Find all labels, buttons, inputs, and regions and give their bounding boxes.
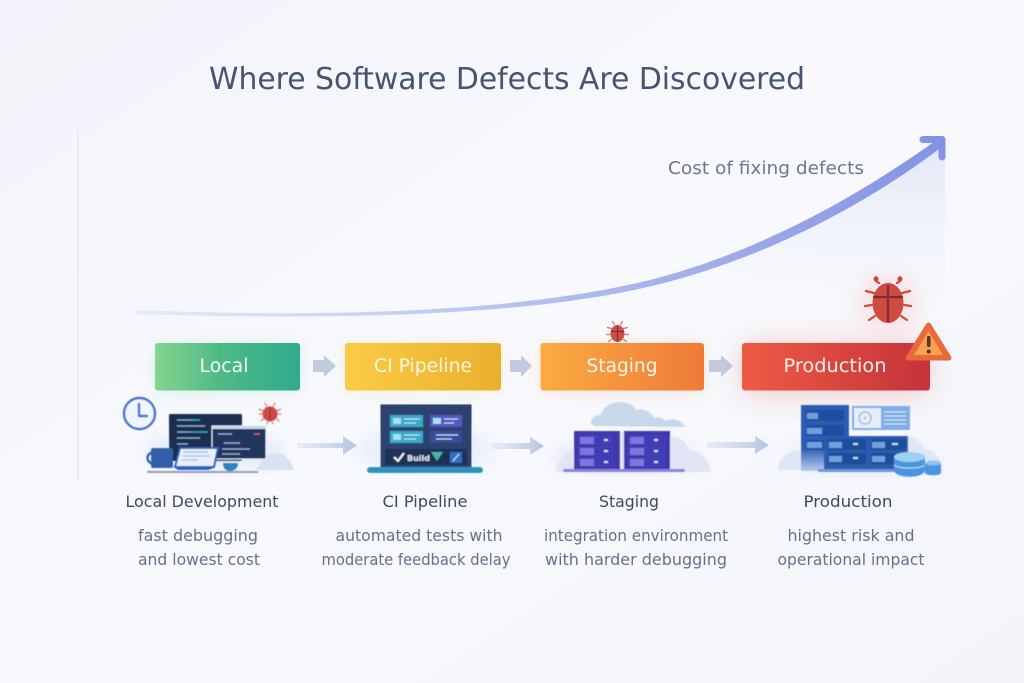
build bar: Build bbox=[407, 454, 430, 463]
label: cost of fixing defects: Cost of fixing defects bbox=[668, 158, 864, 179]
column text: Local Development bbox=[126, 492, 278, 569]
monitor bbox=[169, 414, 242, 461]
stage: CI Pipeline bbox=[345, 343, 501, 391]
arrow: CI Pipeline to Staging bbox=[510, 355, 532, 377]
arrow: curve head bbox=[923, 140, 942, 157]
arrow: Staging illustration to Production illustration bbox=[707, 436, 769, 454]
stage: CI Pipeline: CI Pipeline bbox=[374, 356, 472, 377]
icon: cloud bbox=[591, 402, 685, 427]
column text: CI Pipeline: moderate feedback delay bbox=[322, 550, 510, 569]
illustration: CI pipeline laptop bbox=[355, 405, 495, 473]
arrow: Staging to Production bbox=[709, 355, 733, 377]
column text: Staging bbox=[544, 492, 728, 569]
column text: Local Development: Local Development bbox=[126, 492, 278, 511]
arrow: Local illustration to CI illustration bbox=[297, 436, 357, 455]
illustration: production servers and database bbox=[778, 405, 943, 477]
column text: Production: operational impact bbox=[778, 550, 924, 569]
background clouds bbox=[778, 436, 943, 472]
dashboard panel bbox=[852, 406, 910, 430]
mug bbox=[148, 448, 173, 468]
column text: Staging: integration environment bbox=[544, 526, 728, 545]
stage: Production bbox=[742, 343, 930, 393]
small bowl bbox=[223, 463, 238, 471]
column text: Local Development: fast debugging bbox=[138, 526, 258, 545]
stage: Local bbox=[155, 343, 300, 391]
code window bbox=[212, 426, 266, 459]
background clouds bbox=[556, 432, 711, 472]
chart: rising cost curve bbox=[135, 139, 945, 317]
desk bbox=[147, 471, 258, 473]
column text: Staging: with harder debugging bbox=[545, 550, 727, 569]
column text: CI Pipeline: CI Pipeline bbox=[382, 492, 468, 511]
illustration: local development desk bbox=[124, 398, 294, 473]
arrow: Local to CI Pipeline bbox=[313, 355, 336, 377]
stage: Production: Production bbox=[784, 356, 886, 377]
icon: database bbox=[894, 452, 941, 477]
icon: small bug bbox=[259, 403, 281, 424]
column text: Production bbox=[778, 492, 924, 569]
front racks bbox=[824, 436, 908, 472]
icon: clock bbox=[124, 398, 155, 429]
title: Where Software Defects Are Discovered bbox=[209, 62, 805, 97]
icon: small bug on Staging bbox=[606, 322, 628, 342]
stage: Local: Local bbox=[200, 356, 248, 377]
column text: Production: Production bbox=[804, 492, 892, 511]
column text: CI Pipeline bbox=[322, 492, 510, 569]
tablet bbox=[175, 448, 218, 470]
server rack left bbox=[574, 431, 620, 471]
icon: warning triangle bbox=[908, 325, 949, 358]
server rack right bbox=[624, 431, 670, 471]
column text: CI Pipeline: automated tests with bbox=[336, 526, 502, 545]
illustration: staging servers bbox=[555, 402, 711, 472]
stage: Staging: Staging bbox=[586, 356, 658, 377]
column text: Local Development: and lowest cost bbox=[138, 550, 260, 569]
stage: Staging bbox=[540, 343, 704, 391]
card tiles bbox=[390, 415, 462, 443]
icon: large bug bbox=[856, 273, 920, 333]
laptop base bbox=[367, 467, 483, 473]
arrow: CI illustration to Staging illustration bbox=[492, 437, 544, 455]
tall rack bbox=[801, 405, 849, 471]
column text: Staging: Staging bbox=[599, 492, 659, 511]
column text: Production: highest risk and bbox=[788, 526, 914, 545]
